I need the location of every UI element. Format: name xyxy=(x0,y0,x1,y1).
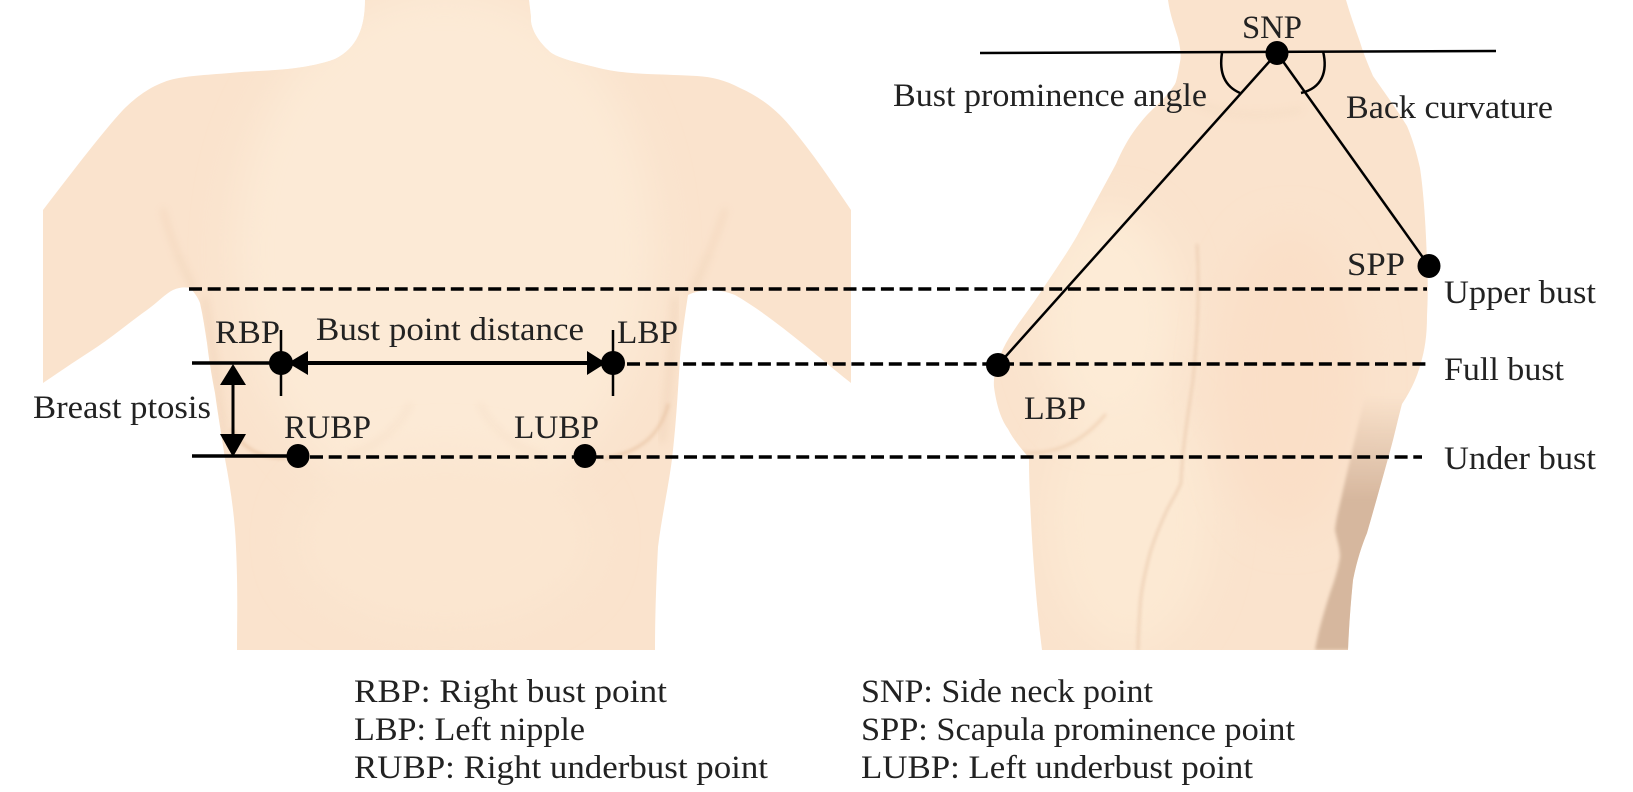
labels: front view xyxy=(33,312,678,446)
line: side neck point to scapula point xyxy=(1277,53,1429,266)
labels: measurement levels: Under bust xyxy=(1444,441,1596,477)
landmark dots xyxy=(269,41,1440,468)
shading: front armpit folds and chest contours xyxy=(163,210,725,458)
legend: right column: SPP: Scapula prominence point xyxy=(861,712,1295,748)
labels: side view: SNP xyxy=(1242,10,1302,46)
legend: left column xyxy=(354,674,768,786)
labels: front view: LUBP xyxy=(514,410,599,446)
arc: back curvature xyxy=(1301,51,1325,93)
legend: left column: RBP: Right bust point xyxy=(354,674,667,710)
arrow: bust point distance xyxy=(288,351,606,375)
legend: right column xyxy=(861,674,1295,786)
legend: right column: LUBP: Left underbust point xyxy=(861,750,1253,786)
legend: left column: RUBP: Right underbust point xyxy=(354,750,768,786)
horizontal reference line at side neck point xyxy=(980,51,1496,53)
labels: side view: SPP xyxy=(1347,247,1405,283)
labels: side view xyxy=(893,10,1553,427)
labels: front view: Breast ptosis xyxy=(33,390,211,426)
shading: side arm contour xyxy=(1021,85,1300,650)
measurement line: under bust xyxy=(192,456,1422,457)
arc: bust prominence angle xyxy=(1221,53,1240,93)
legend: left column: LBP: Left nipple xyxy=(354,712,585,748)
labels: measurement levels: Upper bust xyxy=(1444,275,1596,311)
ticks: bust point vertical markers xyxy=(281,330,613,396)
labels: measurement levels: Full bust xyxy=(1444,352,1564,388)
labels: side view: LBP xyxy=(1024,391,1086,427)
panel: front view torso figure xyxy=(40,0,855,652)
panel: side view torso figure xyxy=(985,0,1435,652)
labels: front view: Bust point distance xyxy=(316,312,584,348)
shading: back shadow behind arm xyxy=(1314,412,1400,650)
measurement line: upper bust xyxy=(189,287,1427,291)
legend: right column: SNP: Side neck point xyxy=(861,674,1153,710)
labels: front view: RUBP xyxy=(284,410,371,446)
labels: side view: Bust prominence angle xyxy=(893,78,1207,114)
line: side neck point to bust point xyxy=(998,53,1277,365)
labels: front view: LBP xyxy=(617,315,678,351)
measurement line: full bust xyxy=(192,363,1427,364)
labels: measurement levels xyxy=(1444,275,1596,477)
labels: side view: Back curvature xyxy=(1346,90,1553,126)
arrow: breast ptosis xyxy=(220,364,246,457)
labels: front view: RBP xyxy=(215,315,280,351)
